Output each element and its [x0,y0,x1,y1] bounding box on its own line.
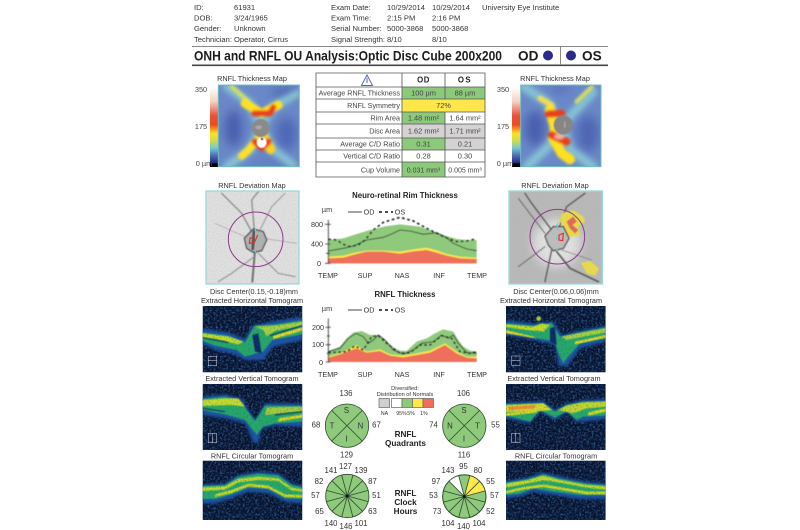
tomogram: OS vertical [506,384,606,450]
panel: OD tomograms: RNFL Circular Tomogram [211,452,293,460]
chart: OS RNFL clock hours: 53 [429,491,438,500]
summary parameters table: 0.31 [416,140,431,148]
patient and exam details header: 2:16 PM [432,14,460,22]
chart: OD RNFL clock hours: 101 [354,519,368,528]
chart: OS RNFL clock hours: 55 [486,477,495,486]
chart legend: OD and OS [312,304,405,367]
chart: RNFL thickness: SUP [358,370,373,379]
chart: OD RNFL quadrants: 67 [372,420,381,430]
chart: OS RNFL clock hours: 97 [432,477,440,486]
heading: RNFL clock hours [394,489,418,516]
title bar: OS [582,48,602,64]
chart: neuro-retinal rim thickness: INF [433,271,445,280]
summary parameters table: 72% [436,101,451,110]
legend: distribution of normals: NA [381,411,389,417]
chart: OD RNFL clock hours: 82 [315,477,323,486]
chart: OS RNFL quadrants: 116 [458,450,470,460]
legend: distribution of normals: 95% [396,411,407,417]
heading: RNFL quadrants: RNFL [395,430,416,439]
chart: OS RNFL clock hours: 57 [490,491,499,500]
legend: distribution of normals: Diversified: [391,386,419,392]
chart: OD RNFL quadrants: S [344,406,349,415]
chart: OS RNFL clock hours: 52 [486,507,495,516]
chart: OS RNFL quadrants: S [461,406,467,415]
chart legend: OD and OS: 400 [311,240,323,248]
heading: RNFL clock hours: Clock [394,498,417,507]
chart: OS RNFL quadrants: I [463,434,465,444]
chart: OS RNFL clock hours: 143 [441,466,455,475]
title bar: OD [518,48,539,64]
panel: OS RNFL deviation map: Extracted Horizontal Tomogram [500,296,602,305]
chart: OD RNFL quadrants: N [358,422,363,430]
patient and exam details header: Exam Time: [331,14,371,22]
summary parameters table: RNFL Symmetry [347,101,400,110]
patient and exam details header: Operator, Cirrus [234,35,288,44]
panel: OD RNFL thickness map [195,74,302,168]
chart: OS RNFL quadrants [429,389,500,460]
summary parameters table: Average C/D Ratio [340,140,400,148]
panel: OS tomograms: RNFL Circular Tomogram [515,452,597,460]
summary parameters table: 1.62 mm² [408,126,440,136]
panel: OS tomograms [506,306,606,520]
chart: RNFL thickness [312,290,487,379]
panel: OD RNFL deviation map [201,181,303,305]
chart: neuro-retinal rim thickness: TEMP [318,271,338,280]
chart: OD RNFL clock hours: 127 [339,462,352,471]
icon: scan position marker [208,356,217,366]
chart: OS RNFL quadrants: 55 [491,420,500,430]
summary parameters table: 0.30 [458,152,472,160]
title bar [192,46,608,66]
chart: OD RNFL quadrants: T [330,422,335,430]
title bar: ONH and RNFL OU Analysis:Optic Disc Cube 200x200 [194,48,502,64]
chart legend: OD and OS: OS [395,208,405,216]
summary parameters table: 0.28 [416,152,431,160]
chart: OS RNFL quadrants: N [447,422,453,430]
heading: RNFL quadrants [385,430,426,448]
chart: OD RNFL quadrants [312,389,381,460]
tomogram: OD vertical [203,384,302,450]
summary parameters table: Rim Area [370,114,400,122]
panel: OS RNFL thickness map: 175 [497,122,509,131]
icon: scan position marker [208,433,217,443]
patient and exam details header: 61931 [234,3,255,12]
chart: OD RNFL clock hours: 141 [324,466,338,475]
icon: scan position marker [512,356,520,365]
chart: OS RNFL clock hours: 80 [474,466,483,475]
patient and exam details header: DOB: [194,14,213,22]
chart: OS RNFL clock hours [429,462,499,530]
chart: OD RNFL quadrants: 136 [339,389,353,398]
chart: neuro-retinal rim thickness [311,191,487,280]
chart: neuro-retinal rim thickness: TEMP [467,271,487,280]
heading: RNFL clock hours: Hours [394,507,418,516]
chart: OS RNFL quadrants: 106 [457,389,470,398]
summary parameters table: 100 µm [411,88,436,98]
patient and exam details header: Gender: [194,24,221,33]
legend: distribution of normals: 5% [407,411,415,417]
legend: distribution of normals: Distribution of Normals [377,392,433,398]
summary parameters table: 1.64 mm² [449,114,481,122]
summary parameters table: 1.71 mm² [449,126,481,136]
chart: OD RNFL quadrants: 68 [312,420,320,430]
chart: OS RNFL clock hours: 104 [441,519,455,528]
chart: OD RNFL clock hours: 140 [324,519,338,528]
legend: distribution of normals: 1% [420,411,428,417]
summary parameters table: Vertical C/D Ratio [343,152,400,160]
chart legend: OD and OS: µm [322,205,332,214]
chart legend: OD and OS: 0 [317,259,321,268]
tomogram: OS horizontal [506,306,606,372]
chart legend: OD and OS: 200 [312,323,324,332]
chart: OD RNFL clock hours: 87 [368,477,377,486]
tomogram: OD horizontal [203,306,302,372]
panel: OS tomograms: Extracted Vertical Tomogram [507,374,601,383]
chart: OD RNFL clock hours: 65 [315,507,324,516]
chart legend: OD and OS: OS [395,306,405,314]
chart legend: OD and OS: 100 [312,340,324,349]
chart: OD RNFL quadrants: 129 [340,450,353,460]
chart: RNFL thickness: NAS [395,370,410,379]
panel: OD RNFL thickness map: RNFL Thickness Map [217,74,287,83]
summary parameters table: 0.21 [458,140,472,148]
panel: OD RNFL thickness map: 0 µm [196,159,212,168]
patient and exam details header: 5000-3868 [387,24,423,33]
summary parameters table: Disc Area [369,126,400,136]
icon: warning triangle [362,75,372,86]
chart legend: OD and OS: 0 [319,358,323,367]
patient and exam details header: University Eye Institute [482,3,559,12]
chart: RNFL thickness: INF [433,370,445,379]
chart: OS RNFL quadrants: 74 [429,420,438,430]
chart legend: OD and OS: 800 [311,220,323,229]
legend: distribution of normals [377,386,434,417]
panel: OS RNFL thickness map: RNFL Thickness Map [520,74,590,83]
patient and exam details header: Unknown [234,24,266,33]
patient and exam details header [194,3,559,44]
summary parameters table: OS [458,76,472,84]
panel: OS RNFL deviation map: Disc Center(0.06,0.06)mm [513,287,599,296]
summary parameters table: Average RNFL Thickness [319,88,400,98]
patient and exam details header: 10/29/2014 [432,3,470,12]
summary parameters table: OD [417,76,430,84]
chart: OD RNFL clock hours: 139 [354,466,368,475]
chart: RNFL thickness: TEMP [467,370,487,379]
patient and exam details header: 3/24/1965 [234,14,268,22]
chart: OS RNFL clock hours: 73 [433,507,441,516]
patient and exam details header: 8/10 [387,35,402,44]
chart: OD RNFL clock hours: 63 [368,507,377,516]
chart: neuro-retinal rim thickness: Neuro-retinal Rim Thickness [352,191,459,200]
summary parameters table [316,73,485,177]
tomogram: OS circular [506,461,606,520]
chart: OS RNFL quadrants: T [475,422,480,430]
chart: RNFL thickness: RNFL Thickness [375,290,436,299]
panel: OD tomograms [203,306,302,520]
panel: OD RNFL deviation map: RNFL Deviation Map [218,181,286,190]
panel: OD RNFL thickness map: 350 [195,85,207,94]
heading: RNFL quadrants: Quadrants [385,439,426,448]
summary parameters table: 0.005 mm³ [448,168,482,174]
chart: OS RNFL clock hours: 95 [459,462,468,471]
patient and exam details header: 5000-3868 [432,24,468,33]
panel: OS RNFL deviation map [500,181,602,305]
chart: neuro-retinal rim thickness: SUP [358,271,373,280]
summary parameters table: 1.48 mm² [408,114,440,122]
patient and exam details header: Serial Number: [331,24,382,33]
chart: neuro-retinal rim thickness: NAS [395,271,410,280]
summary parameters table: Cup Volume [361,166,400,174]
panel: OD RNFL thickness map: 175 [195,122,207,131]
chart legend: OD and OS: OD [364,306,374,314]
summary parameters table: 88 µm [455,88,475,98]
patient and exam details header: Signal Strength: [331,35,385,44]
chart: OD RNFL clock hours: 51 [372,491,381,500]
panel: OS RNFL deviation map: RNFL Deviation Map [521,181,589,190]
chart: OS RNFL clock hours: 104 [472,519,486,528]
panel: OD tomograms: Extracted Vertical Tomogram [205,374,299,383]
patient and exam details header: 10/29/2014 [387,3,425,12]
patient and exam details header: Exam Date: [331,3,371,12]
heading: RNFL clock hours: RNFL [395,489,416,498]
patient and exam details header: ID: [194,3,204,12]
panel: OD RNFL deviation map: Disc Center(0.15,-0.18)mm [210,287,298,296]
panel: OS RNFL thickness map: 0 µm [497,159,513,168]
panel: OS RNFL thickness map [497,74,601,168]
chart: OD RNFL quadrants: I [345,434,348,444]
summary parameters table: 0.031 mm³ [407,168,441,174]
patient and exam details header: Technician: [194,35,232,44]
chart legend: OD and OS: µm [322,304,332,313]
patient and exam details header: 2:15 PM [387,14,415,22]
chart legend: OD and OS: OD [364,208,374,216]
chart: OD RNFL clock hours: 57 [311,491,320,500]
tomogram: OD circular [203,461,302,520]
chart: OD RNFL clock hours [311,462,381,530]
panel: OS RNFL thickness map: 350 [497,85,509,94]
icon: scan position marker [512,433,520,443]
chart: RNFL thickness: TEMP [318,370,338,379]
chart legend: OD and OS [311,205,405,268]
patient and exam details header: 8/10 [432,35,447,44]
panel: OD RNFL deviation map: Extracted Horizontal Tomogram [201,296,303,305]
